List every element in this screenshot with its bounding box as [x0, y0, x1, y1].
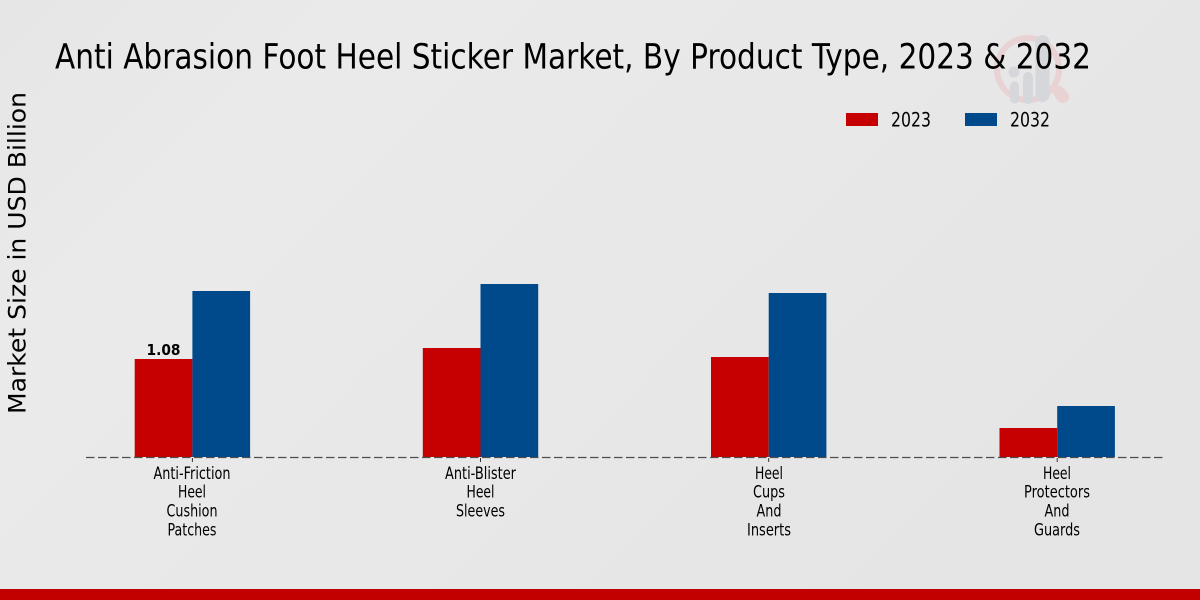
bars: Anti-Friction Heel Cushion Patches — [135, 291, 250, 457]
bar chart — [86, 284, 1164, 462]
watermark logo — [997, 38, 1063, 100]
category label: Heel Protectors And Guards: Guards — [1034, 520, 1080, 540]
category label: Anti-Blister Heel Sleeves: Sleeves — [456, 502, 505, 520]
category label: Anti-Friction Heel Cushion Patches: Cushion — [166, 502, 218, 520]
category label: Heel Protectors And Guards — [1024, 464, 1090, 540]
category label: Anti-Blister Heel Sleeves — [445, 464, 516, 520]
category label: Anti-Friction Heel Cushion Patches — [154, 464, 230, 540]
category label: Heel Protectors And Guards: And — [1044, 502, 1070, 520]
y axis label: Market Size in USD Billion — [4, 92, 32, 414]
legend item: 2032: 2032 — [1010, 108, 1050, 132]
bars: Heel Protectors And Guards — [1000, 406, 1115, 457]
value label: 1.08 — [146, 341, 180, 359]
legend item: 2023 — [846, 108, 931, 132]
category label: Heel Cups And Inserts: Cups — [753, 482, 785, 502]
category label: Anti-Friction Heel Cushion Patches: Heel — [178, 482, 206, 502]
bars: Anti-Blister Heel Sleeves — [423, 284, 538, 457]
category label: Anti-Friction Heel Cushion Patches: Anti-Friction — [154, 464, 230, 483]
legend item: 2032 — [965, 108, 1050, 132]
category label: Anti-Blister Heel Sleeves: Heel — [466, 482, 494, 502]
legend — [846, 108, 1050, 132]
category label: Heel Protectors And Guards: Protectors — [1024, 482, 1090, 502]
category label: Heel Cups And Inserts — [747, 464, 791, 540]
footer bar — [0, 589, 1200, 600]
category label: Heel Protectors And Guards: Heel — [1043, 464, 1071, 483]
category label: Anti-Blister Heel Sleeves: Anti-Blister — [445, 464, 516, 483]
category label: Heel Cups And Inserts: Heel — [755, 464, 783, 483]
category label: Heel Cups And Inserts: And — [756, 502, 782, 520]
bars: Heel Cups And Inserts — [711, 293, 826, 457]
legend item: 2023: 2023 — [891, 108, 931, 132]
category label: Anti-Friction Heel Cushion Patches: Patches — [168, 520, 216, 540]
category label: Heel Cups And Inserts: Inserts — [747, 520, 791, 540]
